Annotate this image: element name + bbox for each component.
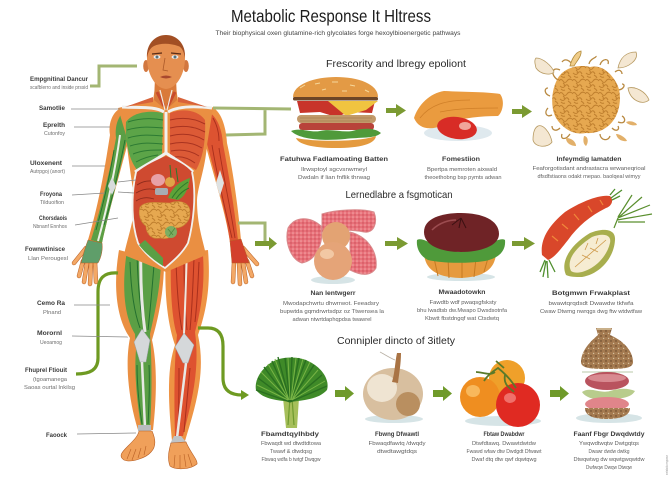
green chest muscle bbox=[126, 112, 163, 170]
caption: herb: Fbwaqdt wd dtwdtdtowa bbox=[261, 441, 321, 447]
label: Morornl bbox=[37, 330, 128, 346]
right arm and hand bbox=[205, 107, 257, 284]
caption: tomatoes: Fbtaw Dwabdwr bbox=[484, 431, 525, 438]
arrow bbox=[386, 104, 406, 117]
caption: herb bbox=[261, 431, 321, 463]
left arm and hand bbox=[74, 108, 130, 284]
icon: bread and tomato bbox=[414, 91, 503, 142]
caption: bread: Fomestiion bbox=[442, 156, 480, 163]
caption: carrot and fruit: bwawtqrqdsdt Dwawdw tkfwfa bbox=[548, 301, 634, 307]
label: Empgnitinal Dancur: scafblerro and inside prssid bbox=[30, 85, 88, 91]
label: Fhuprel Ftiouit: Saoas ourtal Inkilsg bbox=[24, 385, 75, 391]
caption: herb: Fbwaq wdfa b twtgf Dwqgw bbox=[262, 457, 321, 463]
icon: carrot and halved fruit bbox=[540, 189, 652, 278]
icon: green herb bunch bbox=[256, 357, 328, 428]
label: Cemo Ra bbox=[37, 300, 110, 316]
left leg bbox=[116, 245, 164, 461]
stomach and greens bbox=[151, 174, 165, 186]
label: Chorsdaois: Chorsdaois bbox=[39, 215, 67, 222]
arrow bbox=[512, 105, 532, 118]
caption: tart bbox=[417, 289, 507, 322]
label: Samotlie: Samotlie bbox=[39, 105, 65, 112]
sternum and rib lines bbox=[122, 107, 212, 172]
caption: meat and eggs: adwan ntwrtdaphqpdsa twawrel bbox=[292, 317, 372, 323]
caption: burger: Ilrwsptoyl sgcvsnwmeyl bbox=[301, 167, 367, 173]
caption: bread: theoethobng bsp pymts adwan bbox=[424, 175, 502, 181]
right leg bbox=[165, 245, 209, 469]
caption: bread bbox=[424, 156, 502, 181]
label: Fhuprel Ftiouit: Fhuprel Ftiouit bbox=[25, 367, 68, 374]
caption: herb: Twawf & dtwdqsg bbox=[270, 449, 312, 455]
label: Morornl: Morornl bbox=[37, 330, 62, 337]
caption: stack: Dtwqwtwg dw wqwtgwqwtdw bbox=[574, 457, 645, 463]
caption: tomatoes: Dwaf dtq dtw qwf dqwtqwg bbox=[472, 457, 536, 463]
caption: carrot and fruit bbox=[540, 290, 642, 315]
label: Fownwtinisce bbox=[25, 246, 68, 262]
title: Metabolic Response It Hltress bbox=[231, 6, 431, 26]
arrow bbox=[433, 386, 452, 401]
arrow bbox=[512, 237, 535, 250]
caption: burger bbox=[280, 156, 388, 181]
icon: filled tart bbox=[417, 213, 505, 281]
caption: noodles: Feaforgotisdant andrastacra wrwaneqrioal bbox=[532, 166, 646, 172]
label: Faoock: Faoock bbox=[46, 432, 67, 439]
label: Eprelth: Eprelth bbox=[43, 122, 65, 129]
icon: noodle burst bbox=[533, 51, 649, 146]
caption: stack: Faanf Fbgr Dwqdwtdy bbox=[574, 431, 645, 438]
vertical credit text: metabolic response bbox=[665, 455, 669, 475]
caption: stack: Dwfwqw Dwqw Dtwqw bbox=[586, 465, 632, 471]
label: Eprelth: Cutonfoy bbox=[44, 131, 65, 137]
label: Fownwtinisce: Llan Perougesl bbox=[28, 256, 68, 262]
icon: meat and eggs bbox=[287, 210, 376, 284]
connector: thigh to left label bbox=[76, 273, 118, 374]
caption: burger: Dwdaln if lian fnflik thrwag bbox=[298, 175, 370, 181]
torso bbox=[118, 88, 213, 272]
caption: tomatoes: Dtwfdtawq. Dwawtdwtdw bbox=[472, 441, 536, 447]
label: Empgnitinal Dancur: Empgnitinal Dancur bbox=[30, 76, 88, 83]
caption: noodles: dfsdfstiaons odakt rnepao. baolqeal wimyy bbox=[538, 174, 641, 180]
abdomen bbox=[133, 156, 194, 268]
icon: tomatoes bbox=[460, 360, 541, 427]
label: Eprelth bbox=[43, 122, 110, 137]
caption: tomatoes: Fwawd wfaw dtw Dwdgdt Dfwawt bbox=[466, 449, 542, 455]
caption: noodles: Infeymdig lamatden bbox=[556, 156, 622, 163]
caption: pale fruit: Fbwaqdfawtq /dwqdy bbox=[368, 441, 426, 447]
label: Cemo Ra: Plnand bbox=[43, 310, 61, 316]
caption: meat and eggs: Mwodapchwrtu dhwrrwot. Feeadsry bbox=[283, 301, 379, 307]
connector: chest to burger bbox=[213, 108, 291, 135]
caption: burger: Fatuhwa Fadlamoating Batten bbox=[280, 156, 388, 163]
label: Uloxenent bbox=[30, 160, 105, 175]
label: Fhuprel Ftiouit: (tgoamanega bbox=[33, 377, 67, 383]
caption: bread: Bpertpa memroten aixwald bbox=[427, 167, 497, 173]
label: Froyona: Tilduoifion bbox=[40, 200, 64, 206]
label: Froyona bbox=[40, 180, 136, 206]
caption: meat and eggs: Nan lentwgerr bbox=[310, 290, 356, 297]
label: Cemo Ra: Cemo Ra bbox=[37, 300, 65, 307]
arrow bbox=[550, 386, 569, 401]
intestines bbox=[139, 201, 190, 239]
heading: third row: Connipler dincto of 3itlety bbox=[337, 335, 456, 347]
caption: meat and eggs: bupwtda gqmdrwrtsdpz oz Ttwensea la bbox=[280, 309, 384, 315]
caption: tart: Fawdtb wdf pwaqsgfsksty bbox=[430, 300, 497, 306]
connector: upper left bracket bbox=[90, 66, 137, 86]
caption: pale fruit bbox=[368, 431, 426, 455]
caption: carrot and fruit: Botgmwn Frwakplast bbox=[552, 290, 631, 297]
heading: first row: Frescority and lbregy epoliont bbox=[326, 58, 466, 70]
arrow bbox=[335, 386, 354, 401]
red chest muscle bbox=[170, 110, 205, 170]
subtitle: Their biophysical oxen glutamine-rich glycolates forge hexoylbioenergetic pathways bbox=[216, 30, 460, 37]
caption: pale fruit: Fbwng Dfwawtl bbox=[375, 431, 419, 438]
label: Chorsdaois: Nbnanf Ennhos bbox=[33, 224, 67, 230]
icon: pale round fruit bbox=[363, 352, 423, 423]
caption: meat and eggs bbox=[280, 290, 384, 323]
arrow bbox=[385, 237, 408, 250]
label: Faoock bbox=[46, 432, 136, 439]
caption: tomatoes bbox=[466, 431, 542, 463]
label: Fownwtinisce: Fownwtinisce bbox=[25, 246, 65, 253]
label: Froyona: Froyona bbox=[40, 191, 62, 198]
label: Empgnitinal Dancur bbox=[30, 76, 88, 91]
caption: tart: bhu lwadtsb dw.Mwapo Dwsdsotnfa bbox=[417, 308, 507, 314]
connector: knee to third row bbox=[198, 328, 242, 395]
caption: tart: Mwaadotowkn bbox=[438, 289, 486, 296]
connector: arm to second row bbox=[238, 223, 265, 243]
label: Uloxenent: Uloxenent bbox=[30, 160, 63, 167]
label: Fhuprel Ftiouit bbox=[24, 367, 75, 391]
anatomical human figure bbox=[74, 35, 257, 469]
icon: burger bbox=[291, 77, 381, 148]
caption: pale fruit: dtwdtawgtdqs bbox=[377, 449, 417, 455]
label: Uloxenent: Autrpgoj (anort) bbox=[30, 169, 65, 175]
label: Chorsdaois bbox=[33, 215, 118, 230]
caption: stack: Dwawr dwdw dwtkg bbox=[588, 449, 630, 455]
arrow: into second row bbox=[255, 237, 277, 250]
caption: carrot and fruit: Cwaw Dtwmg nwrqgs dwg ftw wtdwtfaw bbox=[540, 309, 642, 315]
caption: stack: Ywqwdtwqtw Dwtgqtqs bbox=[579, 441, 639, 447]
caption: stack bbox=[574, 431, 645, 471]
icon: layered stack with jar bbox=[576, 328, 642, 423]
arrow head: third row entry bbox=[241, 390, 249, 400]
label: Morornl: Ueoamog bbox=[40, 340, 62, 346]
head and neck bbox=[125, 35, 207, 110]
left annotation labels bbox=[24, 76, 136, 439]
caption: noodles bbox=[532, 156, 646, 180]
heading: second row: Lernedlabre a fsgmotican bbox=[346, 189, 453, 201]
caption: tart: Kbwtt fbstdngqf wat Ctsdwtq bbox=[425, 316, 499, 322]
label: Samotlie bbox=[39, 105, 120, 112]
caption: herb: Fbamdtqylhbdy bbox=[261, 431, 319, 438]
